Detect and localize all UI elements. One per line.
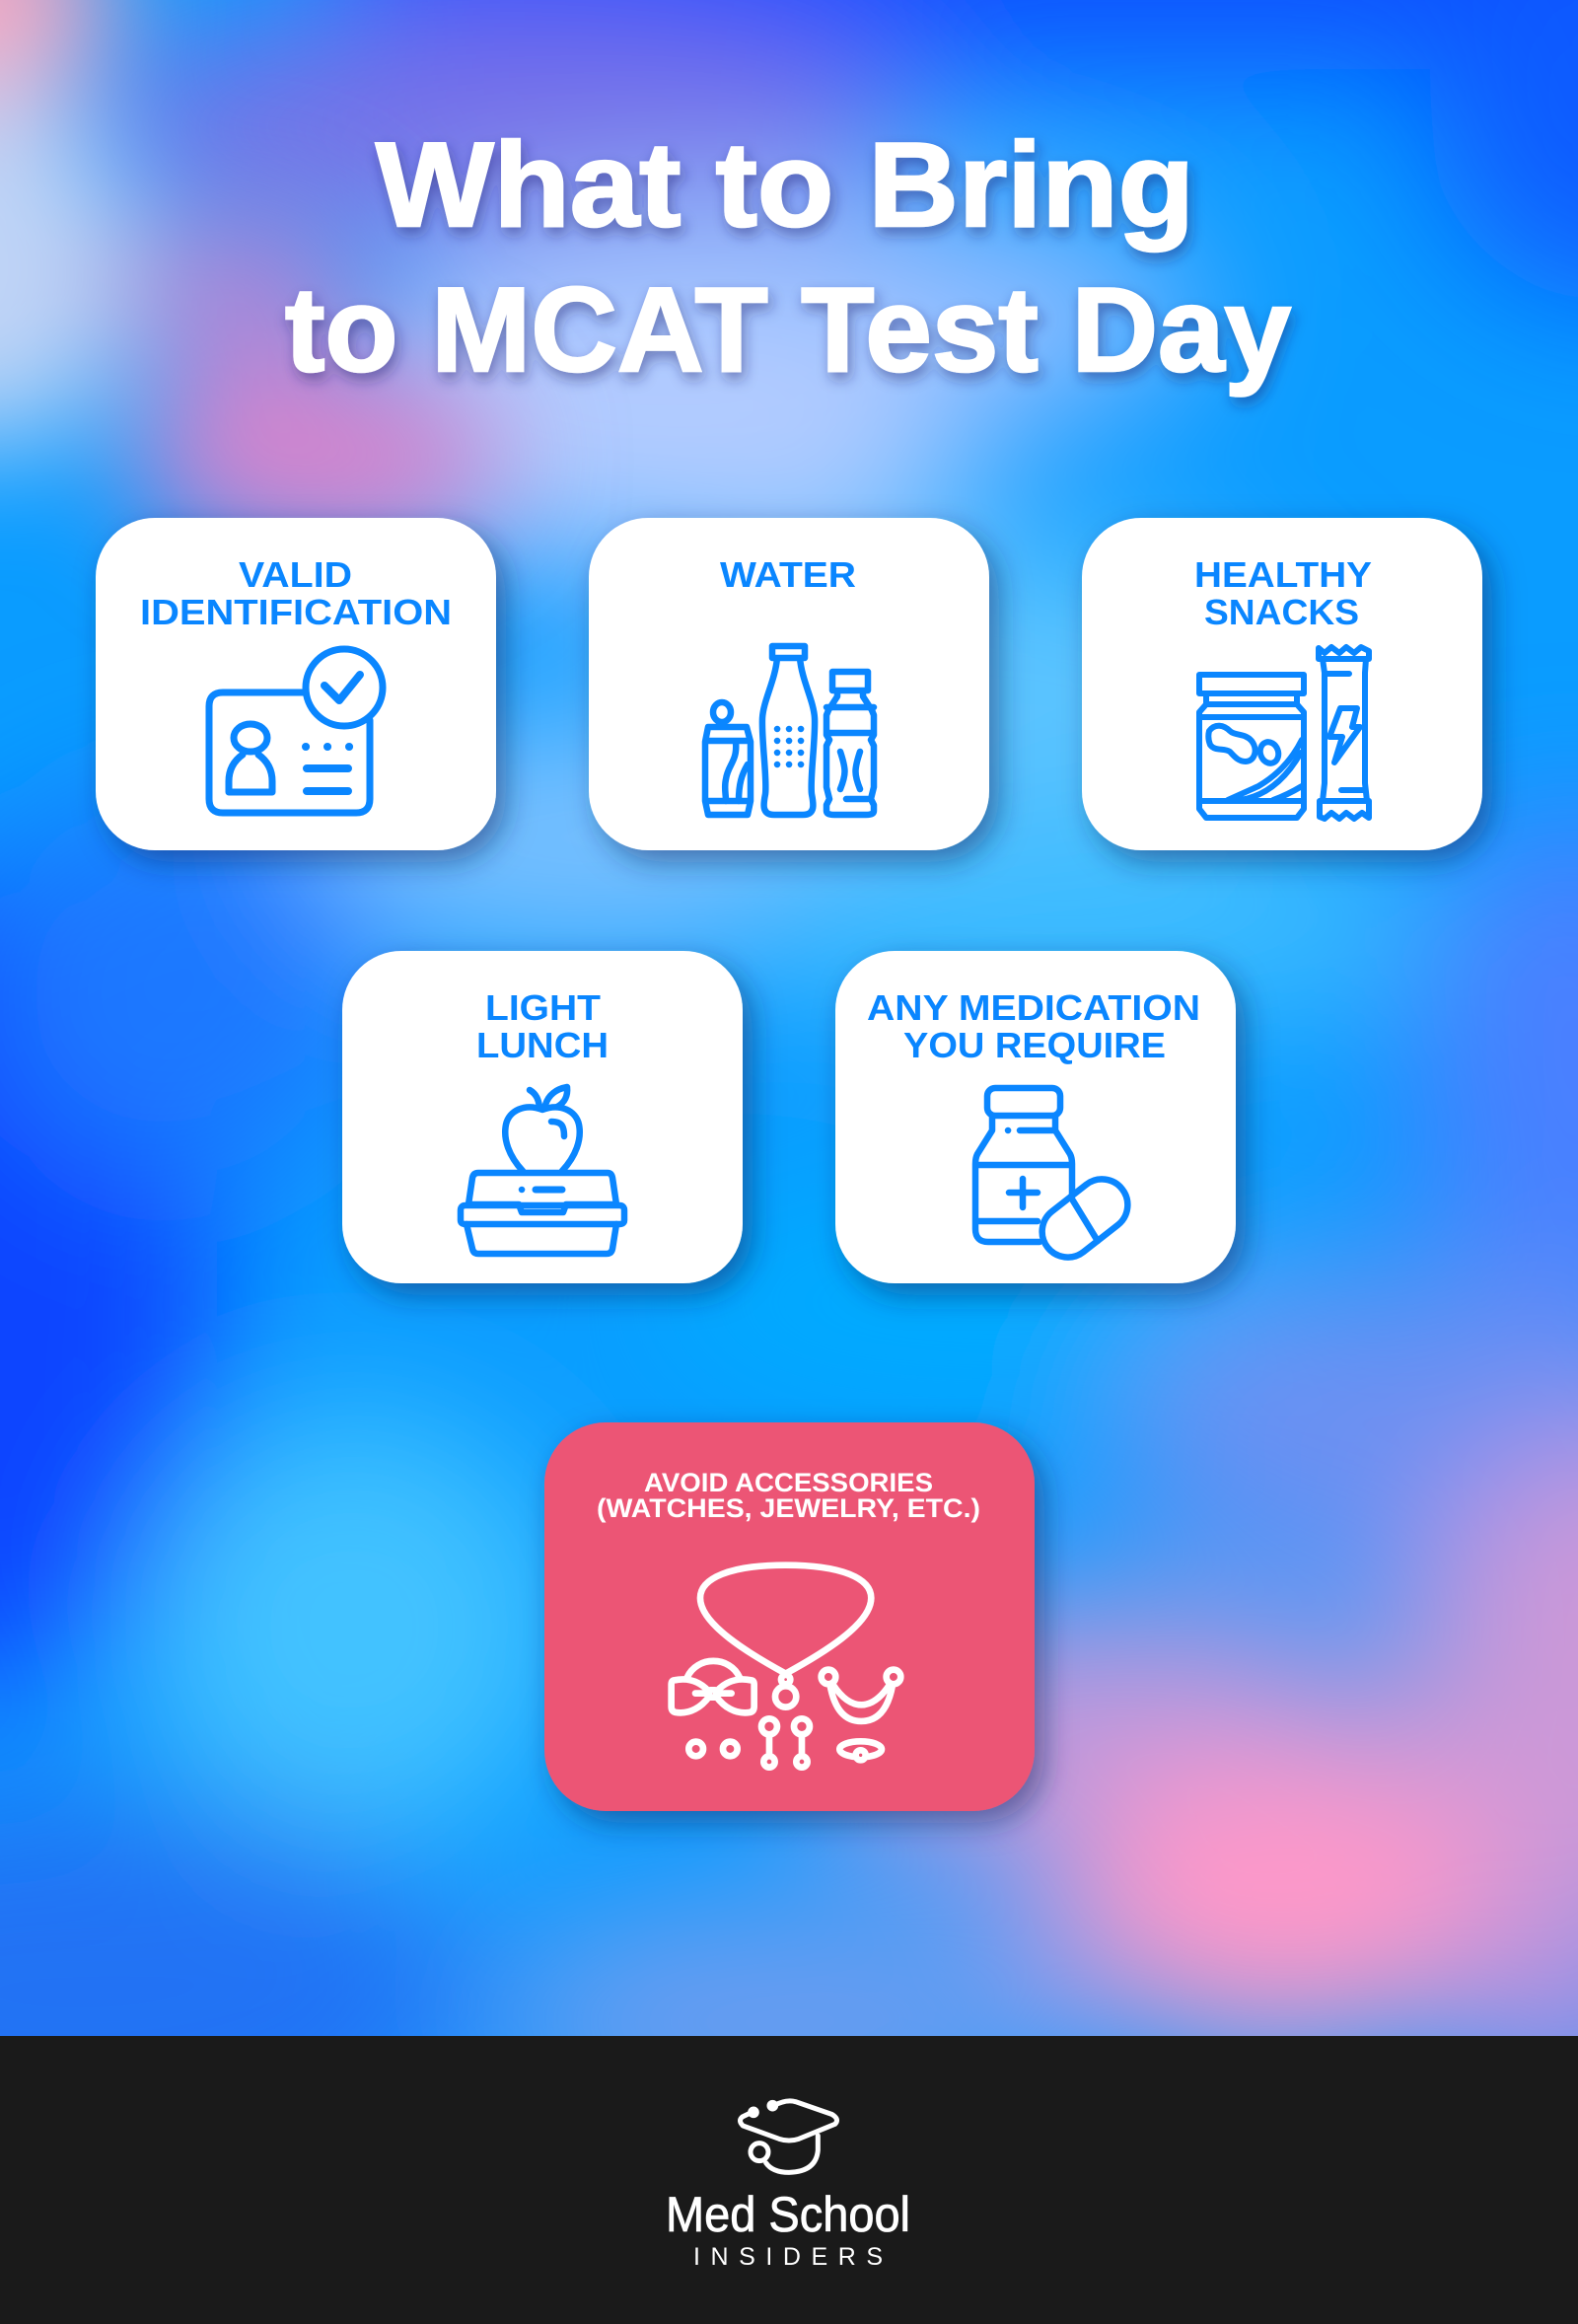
- label: avoid accessories: AVOID ACCESSORIES: [644, 1468, 933, 1497]
- label: light lunch: [476, 987, 609, 1065]
- label: light lunch: LUNCH: [476, 1025, 609, 1065]
- label: any medication you require: [867, 987, 1200, 1065]
- logo wordmark: [666, 2187, 910, 2271]
- panel: valid identification: [96, 518, 496, 850]
- logo wordmark: INSIDERS: [693, 2243, 883, 2271]
- label: light lunch: LIGHT: [485, 987, 601, 1028]
- label: healthy snacks: HEALTHY: [1194, 554, 1372, 595]
- label: healthy snacks: SNACKS: [1204, 592, 1359, 632]
- icon: necklace, bow, earrings and ring: [672, 1565, 900, 1768]
- panel: healthy snacks: [1082, 518, 1482, 850]
- label: avoid accessories: [597, 1468, 980, 1523]
- label: valid identification: VALID: [239, 554, 352, 595]
- label: any medication you require: ANY MEDICATION: [867, 987, 1200, 1028]
- panel: any medication: [835, 951, 1236, 1283]
- icon: apple on lunch box: [461, 1087, 624, 1254]
- label: water: WATER: [720, 554, 856, 595]
- label: valid identification: IDENTIFICATION: [140, 592, 452, 632]
- label: valid identification: [140, 554, 452, 632]
- footer band: [0, 2036, 1578, 2324]
- icon: id card with check mark: [209, 649, 383, 813]
- icon: can and bottles: [705, 646, 874, 815]
- panel: avoid accessories: [544, 1422, 1035, 1811]
- panel: light lunch: [342, 951, 743, 1283]
- icon: medicine bottle and capsule: [975, 1088, 1138, 1268]
- label: avoid accessories: (WATCHES, JEWELRY, ETC.): [597, 1493, 980, 1523]
- title: to MCAT Test Day: [285, 262, 1291, 397]
- label: any medication you require: YOU REQUIRE: [903, 1025, 1166, 1065]
- title: [285, 117, 1291, 397]
- panel: water: [589, 518, 989, 850]
- title: What to Bring: [376, 117, 1194, 252]
- icon: peanut jar and energy bar: [1199, 647, 1369, 819]
- logo: graduation cap stethoscope: [740, 2101, 837, 2172]
- label: healthy snacks: [1194, 554, 1372, 632]
- logo wordmark: Med School: [666, 2187, 910, 2242]
